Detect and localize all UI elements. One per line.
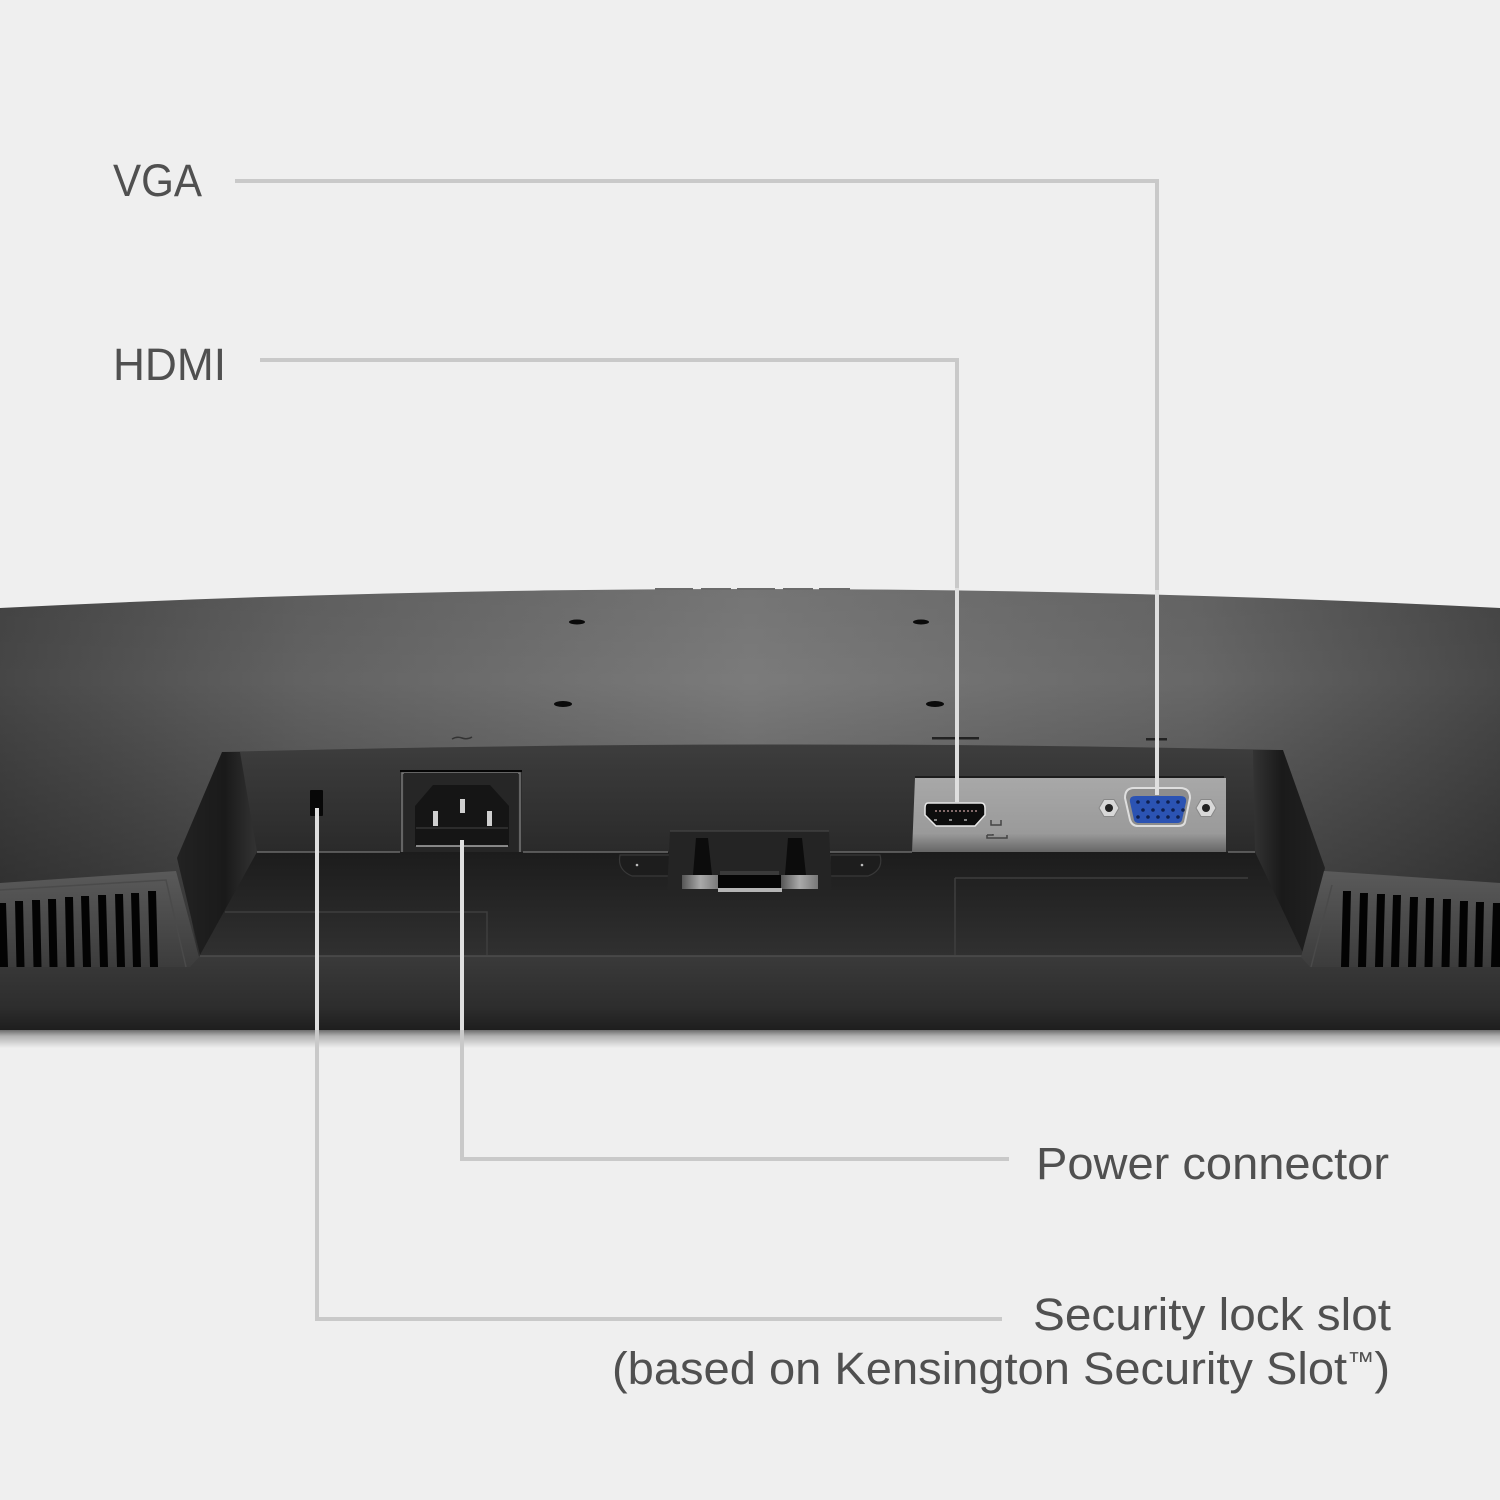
callout: HDMI	[113, 339, 957, 802]
VGA hex nuts	[1099, 800, 1216, 816]
label: VGA: VGA	[113, 155, 202, 206]
leader line: security lock slot	[315, 808, 319, 1032]
HDMI port	[925, 803, 985, 826]
left vent	[0, 871, 199, 967]
monitor rear	[0, 589, 1500, 1048]
label: power connector: Power connector	[1036, 1138, 1389, 1189]
VGA pins	[1136, 800, 1185, 819]
port small markings	[987, 820, 1007, 838]
leader line: HDMI	[260, 360, 957, 590]
socket pins	[433, 799, 492, 826]
power connector	[400, 771, 522, 852]
leader line: VGA	[235, 181, 1157, 592]
label: based on Kensington: (based on Kensington Security Slot	[612, 1343, 1315, 1394]
callout: security lock slot	[317, 808, 1392, 1394]
recess left side wall	[177, 752, 257, 955]
stand hinge bracket	[620, 831, 881, 893]
leader line: power connector	[460, 840, 464, 1032]
recess edge lines	[257, 851, 1255, 853]
connector frame	[400, 771, 522, 852]
VESA screw holes	[554, 620, 944, 707]
port marking labels	[452, 737, 1167, 740]
label: based on Kensington: )	[1374, 1343, 1390, 1394]
bottom shadow	[0, 1028, 1500, 1048]
recess right side wall	[1253, 750, 1325, 955]
plug socket	[415, 785, 509, 846]
right vent	[1301, 871, 1500, 967]
callout: power connector	[462, 840, 1389, 1189]
recess back wall	[195, 744, 1305, 852]
upper back panel	[0, 589, 1500, 960]
label: security lock slot: Security lock slot	[1033, 1289, 1392, 1340]
security lock slot	[310, 790, 323, 816]
lower lip	[0, 956, 1500, 1030]
label: based on Kensington: ™	[1347, 1346, 1374, 1376]
brand logo mark	[655, 588, 850, 590]
VGA blue connector	[1130, 796, 1186, 823]
VGA shell	[1125, 788, 1190, 826]
label: HDMI: HDMI	[113, 339, 226, 390]
callout: VGA	[113, 155, 1157, 795]
IO plate	[912, 777, 1226, 852]
recess floor	[180, 852, 1318, 956]
